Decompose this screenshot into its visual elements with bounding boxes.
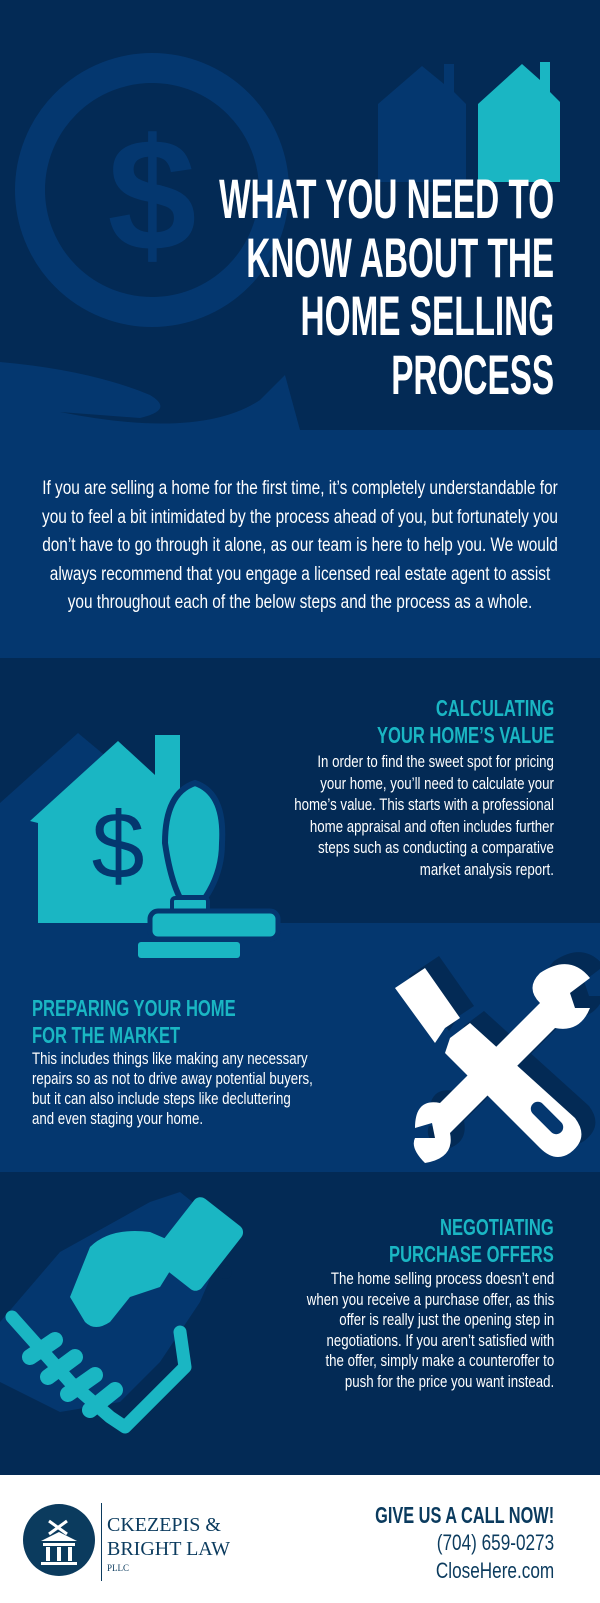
body: negotiating: offer is really just the opening step in	[339, 1310, 554, 1329]
logo text: CKEZEPIS &	[107, 1514, 221, 1536]
body: negotiating: when you receive a purchase offer, as this	[307, 1290, 554, 1308]
body: calculating: your home, you’ll need to calculate your	[320, 774, 554, 792]
heading: negotiating: NEGOTIATING	[440, 1214, 554, 1240]
title	[219, 167, 554, 406]
body: preparing: and even staging your home.	[32, 1109, 203, 1128]
title: WHAT YOU NEED TO	[219, 167, 554, 230]
heading: calculating: YOUR HOME’S VALUE	[377, 722, 554, 748]
panel: negotiating	[0, 1172, 600, 1475]
intro text: don’t have to go through it alone, as our team is here to help you. We would	[42, 535, 558, 556]
icon: coin in hand background: $	[108, 105, 196, 284]
contact: (704) 659-0273	[437, 1530, 554, 1555]
panel: preparing home	[0, 923, 600, 1172]
heading: preparing: PREPARING YOUR HOME	[32, 995, 236, 1021]
body: preparing: repairs so as not to drive away potential buyers,	[32, 1069, 313, 1088]
icon: coin in hand background	[0, 53, 300, 430]
panel: intro	[0, 430, 600, 658]
logo	[23, 1503, 230, 1581]
title: KNOW ABOUT THE	[246, 226, 554, 288]
panel: footer	[0, 1475, 600, 1603]
icon: stamp base bar	[138, 942, 240, 958]
body: preparing: This includes things like making any necessary	[32, 1049, 308, 1068]
body: negotiating	[306, 1269, 554, 1390]
body: preparing: but it can also include steps like decluttering	[32, 1089, 291, 1108]
heading: preparing	[32, 995, 236, 1048]
heading: negotiating	[389, 1214, 554, 1267]
icon: logo emblem	[23, 1504, 95, 1576]
contact: GIVE US A CALL NOW!	[375, 1502, 554, 1528]
title: PROCESS	[391, 342, 554, 406]
body: calculating: steps such as conducting a comparative	[318, 838, 554, 857]
panel: calculating value	[0, 658, 600, 923]
icon: house with stamp: $	[92, 793, 144, 899]
body: preparing	[32, 1049, 313, 1128]
panel: header	[0, 0, 600, 430]
intro text	[42, 478, 558, 613]
contact: CloseHere.com	[436, 1558, 554, 1583]
body: negotiating: The home selling process doesn’t end	[331, 1269, 554, 1288]
heading: preparing: FOR THE MARKET	[32, 1022, 180, 1048]
logo text	[107, 1514, 230, 1573]
heading: calculating: CALCULATING	[436, 695, 554, 721]
icon: wrench and screwdriver	[395, 952, 600, 1163]
intro text: you to feel a bit intimidated by the process ahead of you, but fortunately you	[42, 506, 558, 528]
heading: negotiating: PURCHASE OFFERS	[389, 1241, 554, 1267]
body: negotiating: negotiations. If you aren’t satisfied with	[326, 1330, 554, 1350]
body: negotiating: the offer, simply make a counteroffer to	[325, 1351, 554, 1370]
contact	[375, 1502, 554, 1583]
title: HOME SELLING	[300, 284, 554, 347]
body: calculating	[294, 752, 554, 878]
logo text: BRIGHT LAW	[107, 1538, 230, 1560]
icon: handshake	[0, 1192, 244, 1434]
body: negotiating: push for the price you want instead.	[345, 1372, 554, 1390]
body: calculating: home’s value. This starts with a professional	[294, 795, 554, 814]
logo text: PLLC	[107, 1563, 129, 1573]
heading: calculating	[377, 695, 554, 748]
intro text: always recommend that you engage a licensed real estate agent to assist	[50, 564, 550, 584]
intro text: you throughout each of the below steps and the process as a whole.	[68, 592, 532, 613]
body: calculating: market analysis report.	[420, 860, 554, 878]
icon: house with stamp	[0, 733, 280, 936]
body: calculating: In order to find the sweet spot for pricing	[317, 752, 554, 771]
intro text: If you are selling a home for the first time, it’s completely understandable for	[42, 478, 558, 499]
body: calculating: home appraisal and often includes further	[310, 816, 554, 836]
icon: houses	[378, 62, 560, 182]
